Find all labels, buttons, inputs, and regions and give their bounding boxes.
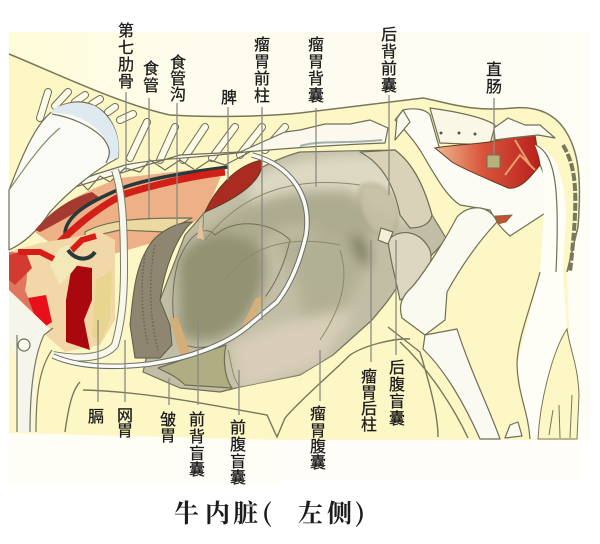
label: 前腹盲囊: 腹: [230, 436, 246, 454]
rumen: fold detail lines: [200, 182, 360, 387]
label: 网胃: 网: [117, 408, 133, 425]
label: 瘤胃后柱: 后: [361, 400, 377, 418]
label: 后腹盲囊: 盲: [389, 393, 405, 411]
thoracic cavity tissue: [35, 166, 225, 255]
label: 后背前囊: 背: [381, 43, 397, 61]
aorta: dark vessel: [65, 167, 228, 252]
label: 瘤胃背囊: 瘤: [308, 36, 324, 54]
label: 瘤胃前柱: 瘤: [254, 36, 270, 54]
label: 第七肋骨: 第: [118, 22, 134, 40]
label: 瘤胃后柱: 柱: [361, 416, 377, 434]
reticulum: [130, 222, 192, 358]
label: 前背盲囊: 前: [189, 411, 205, 429]
rumen: [143, 150, 446, 392]
label: 后腹盲囊: 后: [389, 359, 405, 377]
label: 网胃: 胃: [117, 423, 133, 440]
label: 后背前囊: 后: [381, 26, 397, 44]
shoulder blade: [9, 102, 119, 250]
heart and left organs: [9, 232, 115, 352]
ribs: [40, 92, 285, 160]
aorta: red vessel: [45, 172, 225, 258]
rumen: caudal lobes: [388, 233, 431, 300]
label: 膈: 膈: [88, 408, 104, 426]
rectum and pelvic muscle: [435, 118, 555, 188]
label: 后腹盲囊: 腹: [389, 376, 405, 394]
label: 皱胃: 胃: [160, 428, 176, 445]
label: 瘤胃前柱: 柱: [254, 87, 270, 105]
label: 后背前囊: 前: [381, 60, 397, 78]
label: 前背盲囊: 盲: [189, 445, 205, 463]
label: 后背前囊: 囊: [381, 77, 397, 95]
label: 瘤胃背囊: 背: [308, 70, 324, 88]
label: 瘤胃后柱: 瘤: [361, 368, 377, 386]
label: 瘤胃背囊: 胃: [308, 54, 324, 71]
ventral body outline: [65, 327, 468, 438]
label: 前背盲囊: 囊: [189, 461, 205, 479]
label: 食管沟: 管: [170, 70, 186, 88]
label: 瘤胃背囊: 囊: [308, 87, 324, 105]
back outline of body: [9, 54, 579, 272]
label: 第七肋骨: 肋: [118, 56, 134, 74]
label: 瘤胃前柱: 前: [254, 70, 270, 88]
label: 瘤胃腹囊: 胃: [310, 423, 326, 440]
label: 第七肋骨: 七: [118, 39, 134, 57]
label: 瘤胃后柱: 胃: [361, 385, 377, 402]
label: 瘤胃腹囊: 囊: [310, 454, 326, 472]
label: 食管沟: 食: [170, 54, 186, 72]
label: 食管: 食: [143, 60, 159, 78]
label: 前背盲囊: 背: [189, 428, 205, 446]
label: 前腹盲囊: 前: [230, 419, 246, 437]
spleen: [205, 160, 262, 212]
label: 直肠: 肠: [486, 78, 502, 96]
label: 前腹盲囊: 囊: [230, 469, 246, 487]
label: 瘤胃腹囊: 瘤: [310, 405, 326, 423]
rumen: cranial lobe outline: [173, 224, 290, 347]
label: 前腹盲囊: 盲: [230, 453, 246, 471]
foreleg bones: [9, 290, 53, 432]
rumen: lower sac: [158, 345, 232, 388]
leader lines: [98, 92, 494, 415]
thoracic and lumbar spine: [65, 120, 388, 190]
labels: [88, 22, 502, 487]
label: 皱胃: 皱: [160, 411, 176, 429]
label: 直肠: 直: [486, 61, 502, 79]
femur and pelvis: [395, 108, 555, 439]
rumen: caudodorsal blind sac: [359, 184, 398, 240]
label: 食管沟: 沟: [170, 86, 186, 104]
title: 牛内脏(左侧): [174, 494, 365, 530]
oesophagus: [85, 218, 192, 238]
label: 第七肋骨: 骨: [118, 74, 134, 91]
diaphragm arc: [53, 155, 307, 366]
label: 瘤胃腹囊: 腹: [310, 438, 326, 456]
label: 后腹盲囊: 囊: [389, 410, 405, 428]
label: 瘤胃前柱: 胃: [254, 54, 270, 71]
rumen: blended colour fields: [178, 155, 430, 392]
tail: [517, 145, 579, 439]
seventh rib: [53, 170, 124, 358]
label: 脾: 脾: [221, 89, 237, 107]
label: 食管: 管: [143, 77, 159, 95]
